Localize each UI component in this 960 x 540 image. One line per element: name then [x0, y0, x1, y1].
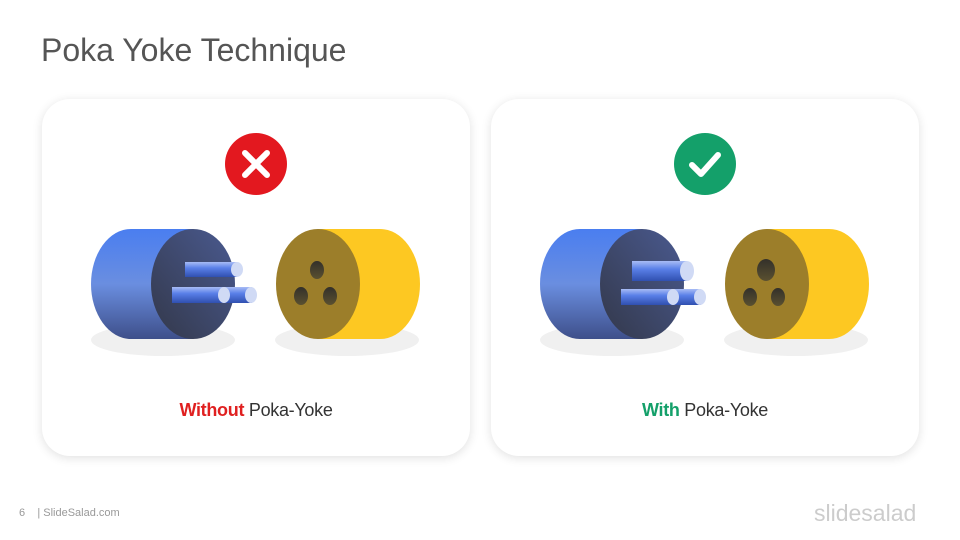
panel: with	[491, 99, 919, 456]
panel: without	[42, 99, 470, 456]
title: Poka Yoke Technique	[41, 32, 346, 68]
footer: 6 | SlideSalad.com	[19, 507, 120, 519]
logo: slidesalad	[814, 500, 916, 526]
plugs: without	[91, 229, 420, 356]
label: without: Without Poka-Yoke	[179, 400, 333, 420]
plugs: with	[540, 229, 869, 356]
icon: red cross	[225, 133, 287, 195]
icon: green check	[674, 133, 736, 195]
label: with: With Poka-Yoke	[642, 400, 768, 420]
